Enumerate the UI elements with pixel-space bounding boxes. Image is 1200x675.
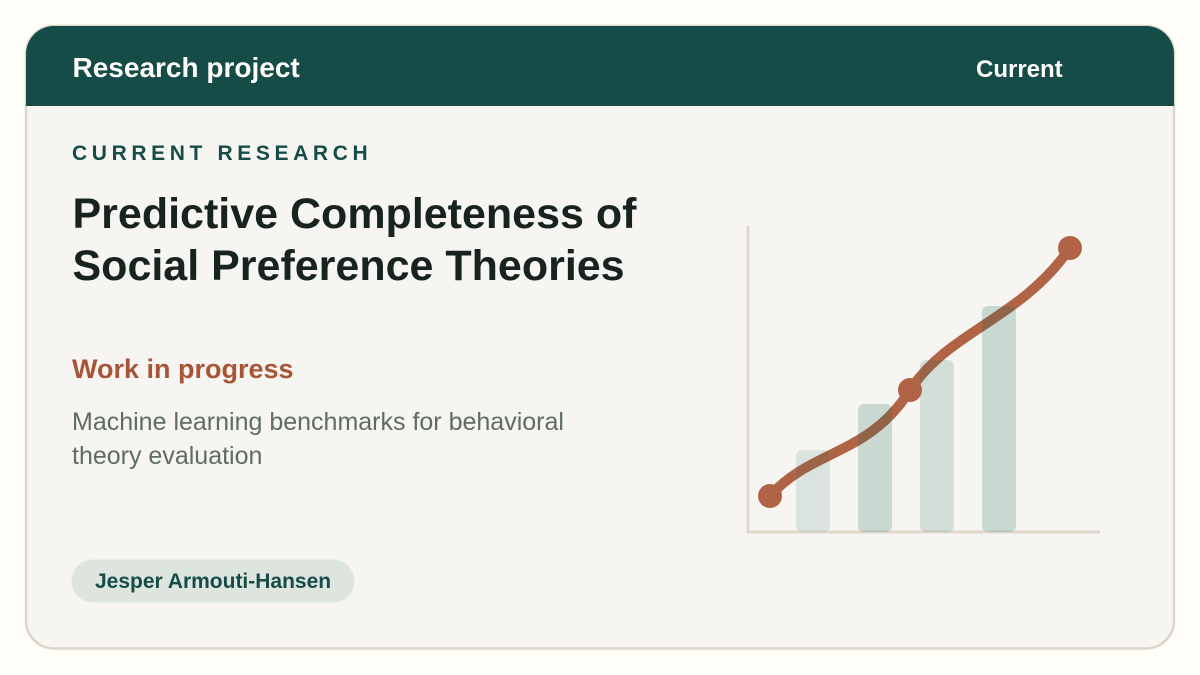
main title: Social Preference Theories [72,242,625,290]
author pill [72,560,354,602]
data points [758,236,1082,508]
chart [748,226,1100,532]
axes [748,226,1100,532]
bars [796,306,1016,532]
author pill: Jesper Armouti-Hansen [95,570,331,593]
header status: Current [976,56,1063,83]
header band [26,26,1174,106]
description: Machine learning benchmarks for behavioral [72,408,564,436]
description: theory evaluation [72,442,262,470]
main title: Predictive Completeness of [72,190,637,238]
trend line [770,248,1070,496]
header title: Research project [72,52,300,83]
status subtitle: Work in progress [72,354,294,384]
eyebrow label: CURRENT RESEARCH [72,142,372,165]
